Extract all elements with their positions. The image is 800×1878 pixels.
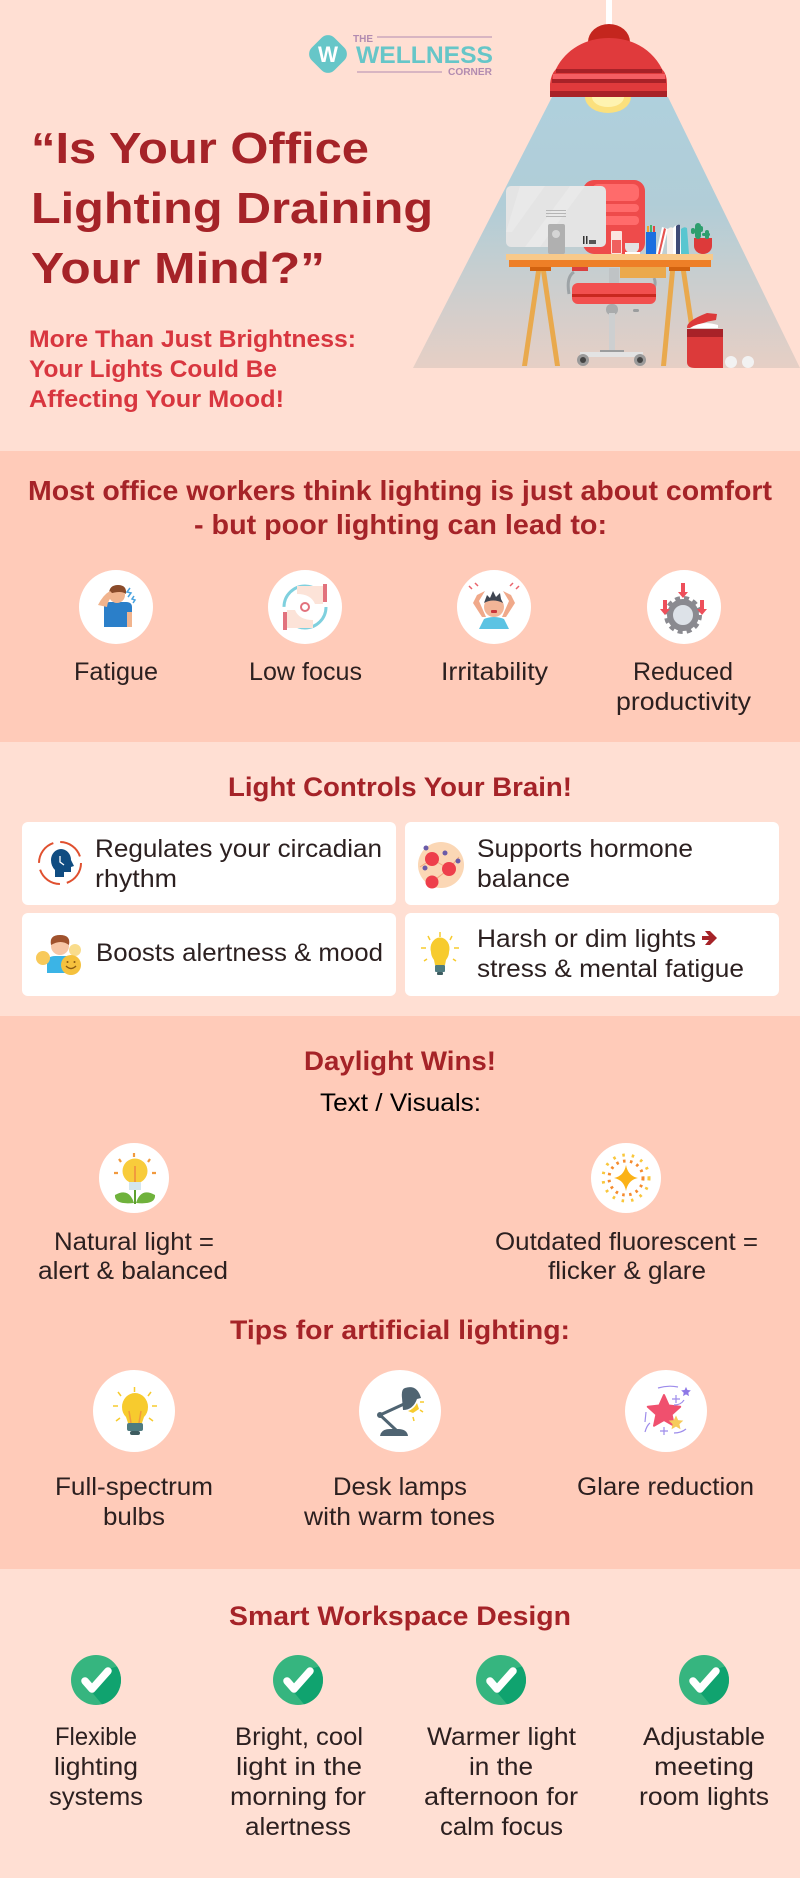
logo: The Wellness Corner: THE bbox=[353, 34, 373, 45]
item: bright cool light bbox=[230, 1655, 366, 1841]
label: flicker & glare bbox=[548, 1257, 706, 1285]
item: natural light bbox=[38, 1143, 228, 1285]
label: Outdated fluorescent = bbox=[495, 1228, 758, 1256]
title bbox=[31, 124, 433, 293]
card: alertness and mood bbox=[22, 913, 396, 996]
subtitle: More Than Just Brightness: bbox=[29, 326, 356, 353]
icon: light bulb bbox=[421, 932, 459, 975]
item: warmer light bbox=[424, 1655, 578, 1841]
icon: hormones bbox=[418, 842, 464, 888]
text bbox=[477, 925, 744, 983]
label bbox=[38, 1228, 228, 1285]
label: Desk lamps bbox=[333, 1473, 467, 1501]
panel: smart workspace design bbox=[0, 1569, 800, 1878]
icon: check bbox=[71, 1655, 121, 1705]
card: circadian rhythm bbox=[22, 822, 396, 905]
icon: check bbox=[679, 1655, 729, 1705]
heading: poor lighting bbox=[28, 475, 772, 540]
title: “Is Your Office bbox=[31, 124, 369, 173]
logo: The Wellness Corner: CORNER bbox=[448, 67, 493, 78]
label: productivity bbox=[616, 688, 752, 716]
label: lighting bbox=[54, 1753, 138, 1781]
text: balance bbox=[477, 865, 570, 893]
icon: check bbox=[273, 1655, 323, 1705]
label: Glare reduction bbox=[577, 1473, 754, 1501]
heading: light controls: Light Controls Your Brain! bbox=[228, 772, 572, 802]
text: Regulates your circadian bbox=[95, 835, 382, 863]
label bbox=[616, 658, 752, 716]
item: flexible lighting systems bbox=[49, 1655, 143, 1811]
icon: head with clock bbox=[39, 842, 81, 884]
label: Fatigue bbox=[74, 658, 158, 686]
label: Low focus bbox=[249, 658, 362, 686]
label: alert & balanced bbox=[38, 1257, 228, 1285]
text bbox=[95, 835, 382, 893]
item: full-spectrum bulbs bbox=[55, 1370, 213, 1531]
label: room lights bbox=[639, 1783, 769, 1811]
panel: effects of poor lighting bbox=[0, 451, 800, 742]
heading: poor lighting: - but poor lighting can lead to: bbox=[194, 509, 607, 540]
item: adjustable meeting room lights bbox=[639, 1655, 769, 1811]
label: bulbs bbox=[103, 1503, 165, 1531]
heading: daylight wins: Daylight Wins! bbox=[304, 1046, 496, 1076]
panel: light controls your brain bbox=[0, 742, 800, 1016]
subtitle bbox=[29, 326, 356, 413]
label: Flexible bbox=[55, 1723, 137, 1751]
label: Adjustable bbox=[643, 1723, 765, 1751]
label: Irritability bbox=[441, 658, 549, 686]
subtitle: Your Lights Could Be bbox=[29, 356, 277, 383]
icon: check bbox=[476, 1655, 526, 1705]
label: with warm tones bbox=[303, 1503, 495, 1531]
text: Boosts alertness & mood bbox=[96, 939, 383, 967]
card: harsh or dim lights bbox=[405, 913, 779, 996]
card: hormone balance bbox=[405, 822, 779, 905]
label bbox=[495, 1228, 758, 1285]
label: Warmer light bbox=[427, 1723, 576, 1751]
item: glare reduction bbox=[577, 1370, 754, 1501]
text: stress & mental fatigue bbox=[477, 955, 744, 983]
item: low focus bbox=[249, 570, 362, 686]
title: Lighting Draining bbox=[31, 184, 433, 233]
icon: smiling faces bbox=[36, 935, 81, 975]
arrow bbox=[702, 931, 717, 945]
heading: smart workspace: Smart Workspace Design bbox=[229, 1601, 571, 1631]
subtitle: Affecting Your Mood! bbox=[29, 386, 284, 413]
illustration: lamp lighting an office desk bbox=[413, 0, 800, 368]
label bbox=[424, 1723, 578, 1841]
text: rhythm bbox=[95, 865, 177, 893]
title: Your Mind?” bbox=[31, 244, 325, 293]
heading: tips: Tips for artificial lighting: bbox=[230, 1315, 570, 1345]
label: systems bbox=[49, 1783, 143, 1811]
panel: daylight and tips bbox=[0, 1016, 800, 1569]
panel: header bbox=[0, 0, 800, 451]
label: afternoon for bbox=[424, 1783, 578, 1811]
text: Harsh or dim lights bbox=[477, 925, 696, 953]
label: Reduced bbox=[633, 658, 733, 686]
label: alertness bbox=[245, 1813, 351, 1841]
label bbox=[49, 1723, 143, 1811]
label bbox=[303, 1473, 495, 1531]
label: morning for bbox=[230, 1783, 366, 1811]
label bbox=[639, 1723, 769, 1811]
item: outdated fluorescent bbox=[495, 1143, 758, 1285]
label: Bright, cool bbox=[235, 1723, 363, 1751]
logo: The Wellness Corner: W bbox=[318, 42, 338, 67]
label: light in the bbox=[236, 1753, 362, 1781]
text: Supports hormone bbox=[477, 835, 693, 863]
subheading: text and visuals: Text / Visuals: bbox=[320, 1089, 481, 1117]
label: Natural light = bbox=[54, 1228, 214, 1256]
label: meeting bbox=[654, 1753, 754, 1781]
item: reduced productivity bbox=[616, 570, 752, 716]
label: Full-spectrum bbox=[55, 1473, 213, 1501]
label bbox=[230, 1723, 366, 1841]
item: desk lamps bbox=[303, 1370, 495, 1531]
text bbox=[477, 835, 693, 893]
item: fatigue bbox=[74, 570, 158, 686]
logo: The Wellness Corner bbox=[305, 31, 493, 78]
label: in the bbox=[469, 1753, 533, 1781]
item: irritability bbox=[441, 570, 549, 686]
label bbox=[55, 1473, 213, 1531]
logo: The Wellness Corner: WELLNESS bbox=[356, 42, 493, 69]
heading: poor lighting: Most office workers think lighting is just about comfort bbox=[28, 475, 772, 506]
label: calm focus bbox=[440, 1813, 563, 1841]
